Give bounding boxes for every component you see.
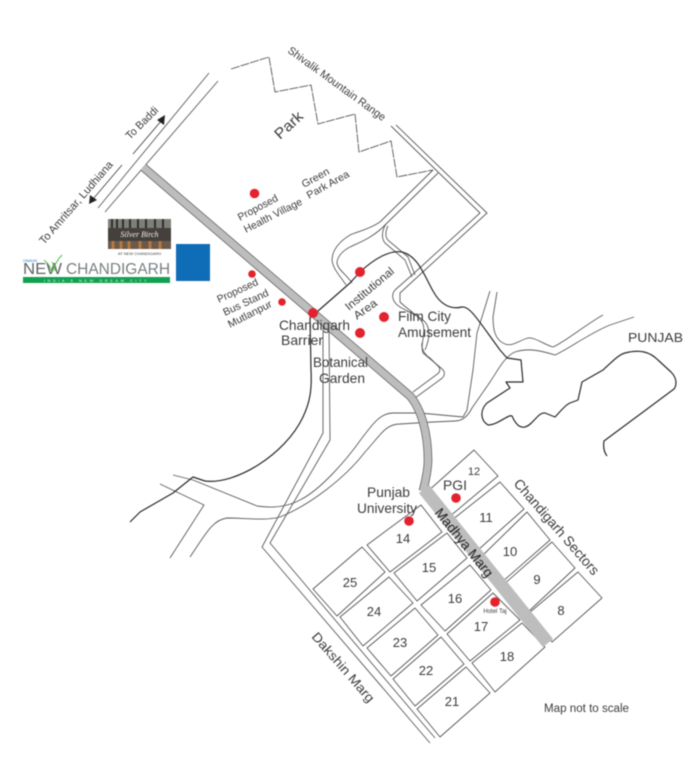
label: Hotel Taj: Hotel Taj — [483, 609, 507, 615]
label: Film City Amusement — [398, 308, 471, 340]
logo: New Chandigarh: CHANDIGARH — [66, 261, 170, 278]
sector numbers: 8 — [557, 603, 565, 618]
label: Madhya Marg: Madhya Marg — [432, 505, 497, 580]
sector numbers: 17 — [474, 619, 488, 634]
label: Proposed Health Village: Health Village — [242, 196, 305, 236]
arrow: to Amritsar — [89, 165, 122, 204]
sector numbers: 21 — [445, 694, 459, 709]
eastern roads — [160, 291, 634, 558]
label: Green Park Area: Green — [300, 166, 332, 191]
sector numbers: 25 — [343, 575, 357, 590]
label: Film City Amusement: Film City — [398, 308, 451, 324]
label: PUNJAB: PUNJAB — [628, 330, 683, 345]
main road: Madhya Marg — [143, 167, 548, 643]
label: Proposed Bus Stand Mutlanpur: Proposed — [215, 276, 260, 306]
highway to Baddi and Amritsar — [98, 73, 218, 212]
label: Punjab University — [357, 485, 417, 516]
label: Punjab University: Punjab — [367, 485, 410, 500]
label: Botanical Garden — [313, 354, 368, 386]
Shivalik mountain range boundary — [231, 57, 433, 177]
sector numbers: 18 — [500, 649, 514, 664]
sector numbers: 24 — [367, 604, 381, 619]
arrow: to Baddi — [133, 115, 165, 154]
note: Map not to scale: Map not to scale — [544, 703, 629, 715]
label: Institutional Area: Institutional — [343, 266, 397, 313]
Botanical Garden roads — [262, 320, 435, 743]
sector numbers: 12 — [468, 466, 480, 478]
label: Dakshin Marg: Dakshin Marg — [309, 629, 378, 705]
sector numbers: 14 — [396, 531, 410, 546]
label: Proposed Bus Stand Mutlanpur — [215, 276, 275, 331]
label: To Amritsar, Ludhiana: To Amritsar, Ludhiana — [37, 158, 116, 247]
logo: Silver Birch: Silver Birch — [120, 230, 159, 239]
dark boundary line: Chandigarh — [130, 252, 676, 522]
label: Proposed Bus Stand Mutlanpur: Bus Stand — [221, 287, 271, 319]
label: Punjab University: University — [357, 501, 417, 516]
logo: Silver Birch — [108, 219, 171, 256]
label: Green Park Area: Park Area — [305, 168, 352, 202]
label: Chandigarh Sectors: Chandigarh Sectors — [511, 475, 603, 578]
sector numbers: 11 — [479, 510, 493, 525]
sector numbers — [343, 466, 565, 709]
sector numbers: 10 — [503, 544, 517, 559]
sector numbers: 23 — [393, 635, 407, 650]
label: Chandigarh Barrier: Chandigarh — [279, 317, 350, 333]
label: To Baddi: To Baddi — [124, 105, 161, 142]
logo: Silver Birch: AT NEW CHANDIGARH — [118, 251, 161, 256]
label: Proposed Health Village: Proposed — [236, 192, 280, 224]
label: Institutional Area: Area — [352, 297, 380, 322]
label: Proposed Bus Stand Mutlanpur: Mutlanpur — [226, 298, 275, 331]
label: Film City Amusement: Amusement — [398, 324, 471, 340]
label: Botanical Garden: Garden — [319, 370, 365, 386]
logo: New Chandigarh: OMAXE — [23, 258, 38, 263]
label: PGI: PGI — [443, 477, 467, 493]
label: Chandigarh Barrier — [279, 317, 350, 348]
sector numbers: 9 — [533, 572, 541, 587]
sector numbers: 22 — [419, 663, 433, 678]
sector blocks — [313, 450, 602, 737]
blue square — [176, 244, 210, 281]
logo: New Chandigarh: INDIA'S NEW DREAM CITY — [44, 278, 149, 283]
label: Chandigarh Barrier: Barrier — [281, 332, 323, 348]
logo: New Chandigarh — [23, 255, 170, 283]
label: Shivalik Mountain Range: Shivalik Mountain Range — [285, 45, 388, 124]
label: Park: Park — [271, 108, 307, 143]
upper boundary roads — [332, 125, 487, 398]
sector numbers: 15 — [422, 560, 436, 575]
logo: New Chandigarh: NEW — [23, 261, 62, 278]
sector numbers: 16 — [448, 591, 462, 606]
location dots — [248, 189, 500, 607]
label: Botanical Garden: Botanical — [313, 354, 368, 370]
